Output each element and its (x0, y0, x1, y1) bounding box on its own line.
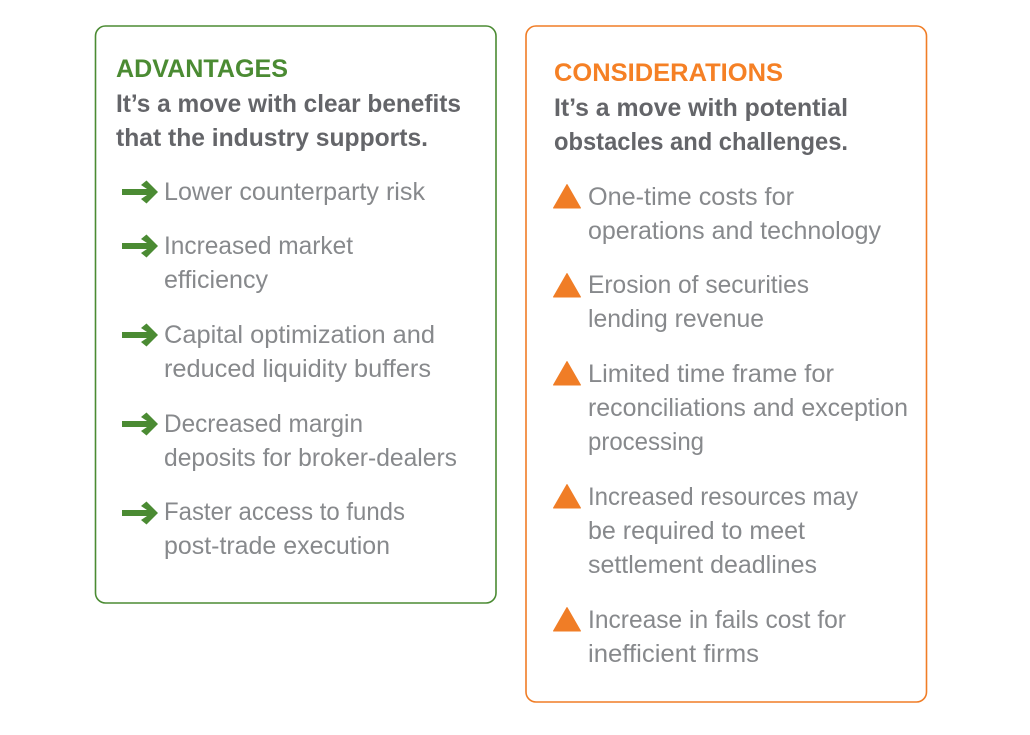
list item: fails cost (554, 606, 846, 668)
list item: increased resources: be required to meet (588, 517, 805, 545)
list item: one-time costs (554, 183, 881, 245)
list item: decreased margin deposits (122, 410, 457, 472)
list item: limited time frame: Limited time frame for (588, 360, 834, 388)
subheading: considerations: It’s a move with potential (554, 94, 848, 122)
list item: capital optimization: reduced liquidity buffers (164, 355, 431, 383)
subheading: advantages (116, 90, 461, 152)
subheading: considerations: obstacles and challenges. (554, 128, 848, 156)
panel: advantages (96, 26, 496, 603)
list item: erosion of lending revenue (554, 271, 809, 333)
list item: increased market efficiency (122, 232, 353, 294)
panel: considerations (526, 26, 926, 702)
list item: increased resources: settlement deadlines (588, 551, 817, 579)
list item: erosion of lending revenue: Erosion of securities (588, 271, 809, 299)
list item: increased market efficiency: Increased market (164, 232, 353, 260)
subheading: advantages: that the industry supports. (116, 124, 428, 152)
list item: faster access to funds (122, 498, 405, 560)
subheading: considerations (554, 94, 848, 156)
list item: erosion of lending revenue: lending revenue (588, 305, 764, 333)
list item: faster access to funds: Faster access to funds (164, 498, 405, 526)
list item: increased resources (554, 483, 858, 579)
heading: advantages: ADVANTAGES (116, 55, 288, 83)
list item: capital optimization: Capital optimization and (164, 321, 435, 349)
list item: decreased margin deposits: deposits for broker-dealers (164, 444, 457, 472)
list item: fails cost: inefficient firms (588, 640, 759, 668)
subheading: advantages: It’s a move with clear benefits (116, 90, 461, 118)
list item: faster access to funds: post-trade execution (164, 532, 390, 560)
list item: capital optimization (122, 321, 435, 383)
list item: limited time frame (554, 360, 908, 456)
list item: increased resources: Increased resources may (588, 483, 858, 511)
list item: lower counterparty risk: Lower counterparty risk (164, 178, 426, 206)
heading: considerations: CONSIDERATIONS (554, 59, 783, 87)
list item: increased market efficiency: efficiency (164, 266, 268, 294)
list item: one-time costs: operations and technology (588, 217, 881, 245)
list item: decreased margin deposits: Decreased margin (164, 410, 363, 438)
list item: limited time frame: processing (588, 428, 704, 456)
list item: one-time costs: One-time costs for (588, 183, 794, 211)
list item: limited time frame: reconciliations and exception (588, 394, 908, 422)
list item: fails cost: Increase in fails cost for (588, 606, 846, 634)
